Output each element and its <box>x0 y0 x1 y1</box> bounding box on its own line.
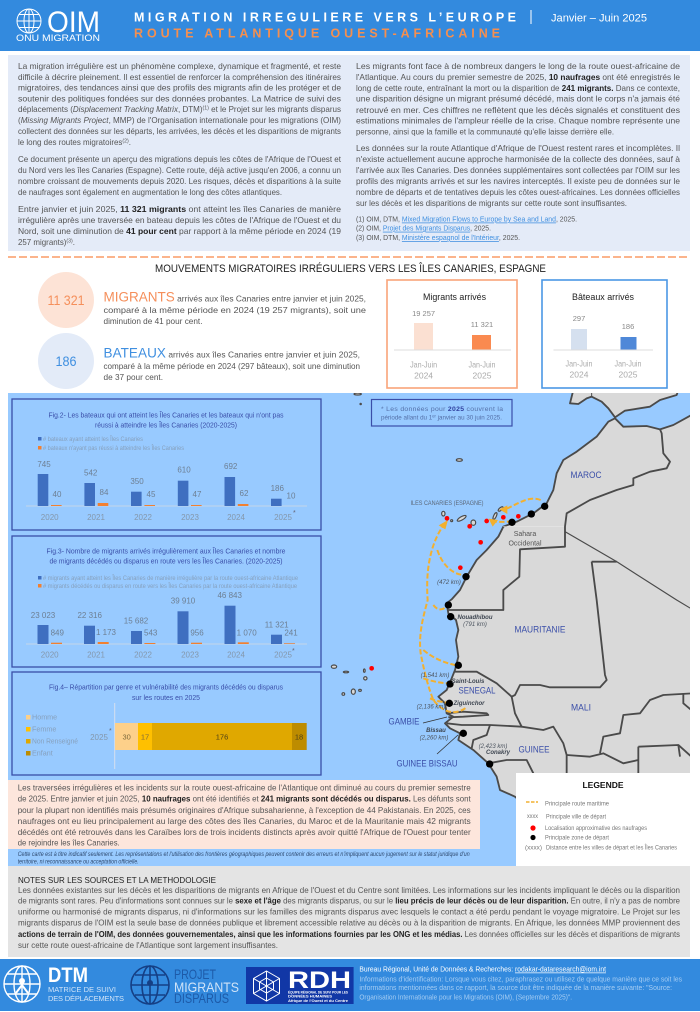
right column text: Les données sur la route Atlantique d'Afrique de l'Ouest restent rares et incomplètes. Il <box>356 143 680 153</box>
footer banner <box>0 959 700 1011</box>
panel: map legend: Distance entre les villes de départ et les Îles Canaries <box>546 844 677 852</box>
right column text: Les migrants font face à de nombreux dangers le long de la route ouest-africaine de <box>356 61 680 71</box>
map labels: (2,260 km) <box>420 736 448 742</box>
figure 3 bars: 22 316 <box>77 611 102 620</box>
map labels: SENEGAL <box>458 686 496 696</box>
left column text: déplacements (Displacement Tracking Matrix, DTM) <box>18 104 204 114</box>
figure 3 legend: # migrants ayant atteint les Îles Canaries de manière irrégulière par la route ouest-africaine Atlantique <box>43 575 299 582</box>
panel: introduction text <box>8 55 690 251</box>
left column text: (1) <box>203 106 209 112</box>
chart: boats arrived: 2024 <box>570 370 589 380</box>
figure 4 legend: Homme <box>32 712 57 722</box>
chart: boats arrived: 2025 <box>619 370 638 380</box>
figure 3 legend: # migrants décédés ou disparus en route vers les Îles Canaries par la route ouest-africaine Atlantique <box>43 583 298 590</box>
stat text boats <box>104 346 360 382</box>
figure 2 bars: 186 <box>271 484 285 493</box>
notes body: sur cette route ouest-africaine de l'Atlantique sont largement insuffisantes. <box>18 940 278 950</box>
RDH logo: Afrique de l'Ouest et du Centre <box>288 999 348 1003</box>
chart: boats arrived <box>542 280 667 388</box>
references: (3) OIM, DTM, Ministère espagnol de l'Intérieur, 2025. <box>356 233 520 242</box>
chart: migrants arrived: 11 321 <box>471 320 493 329</box>
panel: incidents summary text: naufrages ont eu lieu principalement au large des côtes des îles Canaries, du Maroc et de la Mauritanie mais 42 migrants <box>18 816 471 826</box>
map labels: Bissau <box>426 728 446 734</box>
chart: migrants arrived: Migrants arrivés <box>423 292 486 303</box>
figure 3 title <box>46 546 286 566</box>
left column text: migratoires, des tendances ainsi que des profils des migrants afin de les protéger et de <box>18 83 341 93</box>
right column text: long de cette route, entraînant la mort ou la disparition de 241 migrants. Dans ce contexte, <box>356 83 680 93</box>
map labels: (2,136 km) <box>417 704 445 710</box>
stat circle migrants <box>38 272 94 328</box>
figure 3 bars: 2020 <box>41 651 59 660</box>
panel: incidents summary text: pour la plupart non identifiés mais présumés originaires d'Afrique subsaharienne, à l'exception de 44 Pakistanais. En 2025, ces <box>18 805 471 815</box>
map labels: Nouadhibou <box>458 615 493 621</box>
figure 3 bars: 1 070 <box>237 629 257 638</box>
left column text: et le Projet sur les migrants disparus <box>209 104 341 114</box>
figure 3 bars: 2025 <box>274 651 292 660</box>
chart: migrants arrived: 19 257 <box>412 309 435 318</box>
figure 2 bars: 45 <box>147 490 156 499</box>
icon: DTM globe logo <box>4 966 40 1002</box>
notes heading: NOTES SUR LES SOURCES ET LA METHODOLOGIE <box>18 875 216 885</box>
figure 2 bars: 2023 <box>181 513 199 522</box>
title line 1: MIGRATION IRREGULIERE VERS L’EUROPE <box>134 10 516 24</box>
figure 2 bars: * <box>293 510 296 517</box>
figure 4 legend: Non Renseigné <box>32 736 78 746</box>
route arrowheads <box>439 505 507 529</box>
RDH logo: ÉQUIPE RÉGIONAL DE SUIVI POUR LES <box>288 990 349 994</box>
right column text: l'arrivée aux îles Canaries. Des données supplémentaires sont collectées par l'OIM sur les <box>356 165 680 175</box>
callout: 2025 data period: * Les données pour 2025 couvrent la <box>381 406 503 413</box>
stat text migrants: comparé à la même période en 2024 (19 257 migrants), soit une <box>104 305 366 315</box>
left column text: du Nord vers les îles Canaries (Espagne). Cette route, déjà active jusqu'en 2006, a connu un <box>18 165 341 175</box>
map labels <box>388 470 602 768</box>
figure 3 bars: 2024 <box>227 651 245 660</box>
missing migrants wordmark: PROJET <box>174 966 216 982</box>
map labels: GUINEE BISSAU <box>396 758 458 768</box>
figure 4 stacked bar: * <box>109 728 112 735</box>
figure 3 legend <box>38 575 299 590</box>
stat text boats: BATEAUX arrivés aux îles Canaries entre janvier et juin 2025, <box>104 346 360 360</box>
header banner <box>0 0 700 51</box>
left column text: (3) <box>66 238 73 244</box>
panel: map legend: xxxx <box>527 813 539 820</box>
map labels: Sahara <box>514 531 536 538</box>
panel: map legend: Principale ville de départ <box>546 813 606 820</box>
figure 2 bars: 2022 <box>134 513 152 522</box>
panel: map legend: Principale route maritime <box>545 800 610 807</box>
map disclaimer: Cette carte est à titre indicatif seulement. Les représentations et l'utilisation des frontières géographiques peuvent contenir des erreurs et n'impliquent aucun jugement sur le statut juridique d'un <box>18 852 470 858</box>
figure 3 bars: 11 321 <box>265 620 289 629</box>
left column text: Entre janvier et juin 2025, 11 321 migrants ont atteint les îles Canaries de manière <box>18 204 341 214</box>
icon: hexagon network <box>254 971 280 1001</box>
panel: incidents summary text: de rejoindre les îles Canaries. <box>18 837 120 847</box>
chart: migrants arrived: 2024 <box>414 370 433 380</box>
figure 4 legend: Enfant <box>32 748 53 758</box>
left column text <box>18 61 342 247</box>
figure 2 legend: # bateaux n'ayant pas réussi à atteindre les Îles Canaries <box>43 445 184 452</box>
notes body: uniforme ou harmonisé de migrants disparus, ni d'informations sur les familles des migrants disparus avec lesquels le contact a été perdu pendant le voyage migratoire. Le Projet sur les <box>18 907 680 917</box>
right column text: l'Atlantique. Au cours du premier semestre de 2025, 10 naufrages ont été enregistrés le <box>356 72 680 82</box>
left column text: difficile à décrire pleinement. Il est essentiel de renforcer la compréhension des itinéraires <box>18 72 341 82</box>
missing migrants wordmark: DISPARUS <box>174 990 229 1006</box>
left column text: La migration irrégulière est un phénomène complexe, dynamique et fragmenté, et reste <box>18 61 341 71</box>
map labels: ILES CANARIES (ESPAGNE) <box>410 500 484 507</box>
figure 3 bars: 15 682 <box>124 617 149 626</box>
map labels: Saint-Louis <box>452 679 485 685</box>
figure 4 stacked bar: 17 <box>141 732 149 742</box>
footer contact and citation: informations mentionnées dans ce rapport, la source doit être indiquée de la manière suivante: "Source: <box>359 983 672 992</box>
figure 2 bars: 2021 <box>87 513 105 522</box>
chart: boats arrived: 186 <box>622 322 634 331</box>
callout: 2025 data period: janvier au 30 juin 2025. <box>436 414 502 422</box>
figure 3 bars: 23 023 <box>31 611 56 620</box>
figure 2 title: réussi à atteindre les Îles Canaries (2020-2025) <box>95 420 237 430</box>
callout: 2025 data period: période allant du 1 <box>381 414 437 422</box>
map labels: Conakry <box>486 750 511 756</box>
panel: incidents summary text: décédés ont été retrouvés dans les Caraïbes lors de trois incidents distincts après avoir quitté l'Afrique de l'Ouest pour tenter <box>18 827 471 837</box>
panel: map legend: Localisation approximative des naufrages <box>545 825 647 832</box>
map labels: MALI <box>571 702 591 712</box>
stat text migrants <box>104 290 366 326</box>
DTM wordmark <box>48 964 124 1003</box>
figure 2 bars: 62 <box>240 489 249 498</box>
figure 2 bars: 10 <box>287 492 296 501</box>
right column text: profils des migrants arrivés et sur les navires interceptés. Il existe peu de données sur le <box>356 176 680 186</box>
footer contact and citation <box>359 964 682 1002</box>
panel: incidents summary text <box>8 780 480 849</box>
map: routes, departure points, shipwrecks <box>369 499 548 768</box>
chart: migrants arrived <box>387 280 517 388</box>
missing migrants wordmark <box>174 966 239 1006</box>
DTM wordmark: MATRICE DE SUIVI <box>48 985 116 994</box>
footer contact and citation: Informations d'identification: Lorsque vous citez, paraphrasez ou utilisez de quelque manière que ce soit les <box>359 974 682 984</box>
figure 3 title: de migrants décédés ou disparus en route vers les Îles Canaries. (2020-2025) <box>50 556 282 566</box>
figure 4 stacked bar: 2025 <box>90 733 108 742</box>
title line 2: ROUTE ATLANTIQUE OUEST-AFRICAINE <box>134 26 500 40</box>
notes body: actions de terrain de l'OIM, des données gouvernementales, ainsi que les informations fournies par les ONG et les médias. Les données officielles sur les décès et disparitions de migrants <box>18 929 680 939</box>
figure 4 title <box>49 682 283 702</box>
left column text: . <box>73 237 75 247</box>
section heading: MOUVEMENTS MIGRATOIRES IRRÉGULIERS VERS LES ÎLES CANARIES, ESPAGNE <box>155 262 546 275</box>
figure 2 legend: # bateaux ayant atteint les Îles Canaries <box>43 436 143 443</box>
figure 2 bars: 84 <box>100 488 109 497</box>
panel: figure 3 migrants chart <box>12 536 321 667</box>
RDH logo <box>246 967 354 1004</box>
period: Janvier – Juin 2025 <box>551 12 647 24</box>
figure 3 bars: * <box>292 648 295 655</box>
map labels: GAMBIE <box>388 716 420 726</box>
callout: 2025 data period: er <box>432 414 436 418</box>
right column text: nombre de départs et de tentatives depuis les côtes ouest-africaines. Les données officielles <box>356 187 680 197</box>
panel: map legend: LEGENDE <box>582 780 624 790</box>
stat: migrants <box>38 272 366 328</box>
map labels: (1,541 km) <box>421 673 449 679</box>
figure 4 stacked bar <box>90 703 307 769</box>
map labels: Ziguinchor <box>452 701 485 707</box>
right column text: une disparition désigne un migrant présumé décédé, mais dont le corps n'a jamais été <box>356 94 680 104</box>
right column text: n'existe actuellement aucune approche harmonisée de la collecte des données, sauf à <box>356 154 680 164</box>
icon: missing migrants globe logo <box>131 966 169 1004</box>
left column text: collectent des données sur les départs, les arrivées, les décès et les disparitions de migrants <box>18 126 341 136</box>
left column text: 257 migrants) <box>18 237 69 247</box>
figure 3 bars: 849 <box>51 629 65 638</box>
left column text: soutenir des politiques fondées sur des données probantes. La Matrice de suivi des <box>18 93 341 103</box>
DTM wordmark: DTM <box>48 964 88 987</box>
references <box>356 214 577 242</box>
figure 3 bars: 2022 <box>134 651 152 660</box>
left column text: de naufrages sont également en augmentation le long des côtes atlantiques. <box>18 187 282 197</box>
logo subtitle: ONU MIGRATION <box>16 33 100 44</box>
stat text boats: de 37 pour cent. <box>104 372 163 382</box>
stat text migrants: diminution de 41 pour cent. <box>104 316 202 326</box>
right column text: sur les décès et les disparitions de migrants sur cette route sont insuffisantes. <box>356 198 627 208</box>
figure 4 title: sur les routes en 2025 <box>132 693 200 702</box>
figure 4 stacked bar: 30 <box>123 732 131 742</box>
icon: OIM globe logo <box>17 9 41 33</box>
right column text <box>356 61 680 208</box>
references: (1) OIM, DTM, Mixed Migration Flows to Europe by Sea and Land, 2025. <box>356 214 577 224</box>
figure 3 title: Fig.3- Nombre de migrants arrivés irrégulièrement aux Îles Canaries et nombre <box>46 546 286 556</box>
RDH logo: DONNÉES HUMAINES <box>288 994 333 998</box>
figure 2 title: Fig.2- Les bateaux qui ont atteint les Îles Canaries et les bateaux qui n'ont pas <box>48 410 284 420</box>
chart: migrants arrived: Jan-Juin <box>410 360 437 370</box>
figure 2 bars: 47 <box>193 490 202 499</box>
stat circle boats <box>38 333 94 389</box>
references: (2) OIM, Projet des Migrants Disparus, 2025. <box>356 224 491 233</box>
figure 3 bars: 2023 <box>181 651 199 660</box>
left column text: irrégulière après une traversée en bateau depuis les côtes de l'Afrique de l'Ouest et du <box>18 215 341 225</box>
right column text: estimations minimales de l'ampleur réelle de la crise. Chaque nombre représente une <box>356 116 680 126</box>
callout: 2025 data period <box>372 400 512 426</box>
panel: figure 2 boats chart <box>12 399 321 530</box>
notes body: Les données existantes sur les décès et les disparitions de migrants en Afrique de l'Ouest et du Centre sont limitées. Les informations sur les incidents impliquant le décès ou la disparition <box>18 885 680 895</box>
left column text: (2) <box>122 138 129 144</box>
left column text: Ce document présente un aperçu des migrations depuis les côtes de l'Afrique de l'Ouest et <box>18 154 342 164</box>
map labels: Occidental <box>508 540 542 548</box>
panel: figure 4 gender breakdown <box>12 672 321 775</box>
figure 2 bars: 2020 <box>41 513 59 522</box>
figure 2 bars: 610 <box>177 466 191 475</box>
figure 2 bars: 2025 <box>274 513 292 522</box>
map labels: (791 km) <box>463 622 487 628</box>
stat number boats: 186 <box>56 354 76 369</box>
figure 2 bars: 692 <box>224 462 238 471</box>
map: sea background and land <box>8 390 693 866</box>
chart: boats arrived: Jan-Juin <box>566 358 593 368</box>
left column text: nombre croissant de mouvements depuis 2020. Les risques, décès et disparitions à la suite <box>18 176 341 186</box>
figure 2 bars: 40 <box>53 490 62 499</box>
figure 2 bars <box>26 460 307 522</box>
map labels: (472 km) <box>437 580 461 586</box>
left column text: (Missing Migrants Project, MMP) de l'Organisation internationale pour les migrations (OIM) <box>18 115 341 125</box>
panel: map legend <box>516 773 690 866</box>
chart: boats arrived: Bâteaux arrivés <box>572 292 634 303</box>
figure 3 bars: 1 173 <box>96 628 117 637</box>
stat number migrants: 11 321 <box>48 293 84 308</box>
logo wordmark OIM: OIM <box>47 6 100 39</box>
map disclaimer: territoire, ni reconnaissance ou acceptation officielle. <box>18 860 139 866</box>
figure 2 legend <box>38 436 184 452</box>
map labels: (2,423 km) <box>479 744 507 750</box>
chart: boats arrived: Jan-Juin <box>614 358 642 368</box>
figure 2 bars: 2024 <box>227 513 245 522</box>
figure 4 legend: Femme <box>32 724 56 734</box>
map labels: MAROC <box>570 470 602 480</box>
panel: map legend: Principale zone de départ <box>545 835 609 842</box>
panel: notes and methodology <box>8 866 690 957</box>
panel: incidents summary text: Les traversées irrégulières et les incidents sur la route ouest-africaine de l'Atlantique ont diminué au cours du premier semestre <box>18 783 471 793</box>
shipwreck locations <box>369 514 521 671</box>
notes body <box>18 885 680 950</box>
figure 3 bars: 2021 <box>87 651 105 660</box>
figure 3 bars: 956 <box>190 629 204 638</box>
map labels: MAURITANIE <box>514 624 566 634</box>
missing migrants wordmark: MIGRANTS <box>174 979 239 995</box>
DTM wordmark: DES DÉPLACEMENTS <box>48 994 124 1003</box>
figure 4 stacked bar: 176 <box>216 732 228 742</box>
left column text: . <box>129 137 131 147</box>
figure 3 bars: 39 910 <box>171 597 196 606</box>
panel: map legend: (xxxx) <box>525 844 542 852</box>
figure 4 stacked bar: 18 <box>295 732 303 742</box>
stat: boats <box>38 333 360 389</box>
left column text: le long des routes migratoires <box>18 137 128 147</box>
notes body: de migrants sont rares. Peu d'informations sont connues sur le sexe et l'âge des migrants disparus, ou sur le lieu précis de leur décès ou de leur disparition. En outre, il n'y a pas de nombre <box>18 896 680 906</box>
notes body: migrants disparus de l'OIM est la seule base de données publique et librement accessible relative au décès ou à la disparition de migrants. En Afrique, les données MMP proviennent des <box>18 918 680 928</box>
figure 4 legend <box>26 712 78 758</box>
figure 3 bars: 241 <box>284 628 298 637</box>
figure 4 title: Fig.4– Répartition par genre et vulnérabilité des migrants décédés ou disparus <box>49 682 283 692</box>
figure 2 bars: 350 <box>130 477 144 486</box>
figure 3 bars: 46 843 <box>217 591 242 600</box>
figure 2 title <box>48 410 284 430</box>
right column text: personne, ainsi que la famille et la communauté qu'elle laisse derrière elle. <box>356 126 614 136</box>
maritime routes <box>420 499 541 712</box>
figure 3 bars <box>26 591 307 660</box>
figure 2 bars: 542 <box>84 469 98 478</box>
footer contact and citation: Bureau Régional, Unité de Données & Recherches: rodakar-dataresearch@iom.int <box>359 964 606 974</box>
stat text boats: comparé à la même période en 2024 (297 bâteaux), soit une diminution <box>104 361 360 371</box>
departure zones <box>445 503 548 768</box>
footer contact and citation: Organisation Internationale pour les Migrations (OIM), (Septembre 2025)". <box>359 992 572 1002</box>
figure 3 bars: 543 <box>144 629 158 638</box>
RDH logo: RDH <box>288 967 351 994</box>
chart: migrants arrived: Jan-Juin <box>468 360 496 370</box>
figure 2 bars: 745 <box>37 460 51 469</box>
right column text: retrouvé en mer. Ces chiffres ne reflètent que les décès signalés et constituent des <box>356 105 680 115</box>
chart: boats arrived: 297 <box>573 314 585 323</box>
left column text: Nord, soit une diminution de 41 pour cent par rapport à la même période en 2024 (19 <box>18 226 341 236</box>
panel: incidents summary text: de 2025. Entre janvier et juin 2025, 10 naufrages ont été identifiés et 241 migrants sont décédés ou disparus. Les défunts sont <box>18 794 471 804</box>
stat text migrants: MIGRANTS arrivés aux îles Canaries entre janvier et juin 2025, <box>104 290 366 304</box>
map labels: GUINEE <box>518 744 550 754</box>
map disclaimer <box>18 852 470 866</box>
chart: migrants arrived: 2025 <box>473 370 492 380</box>
